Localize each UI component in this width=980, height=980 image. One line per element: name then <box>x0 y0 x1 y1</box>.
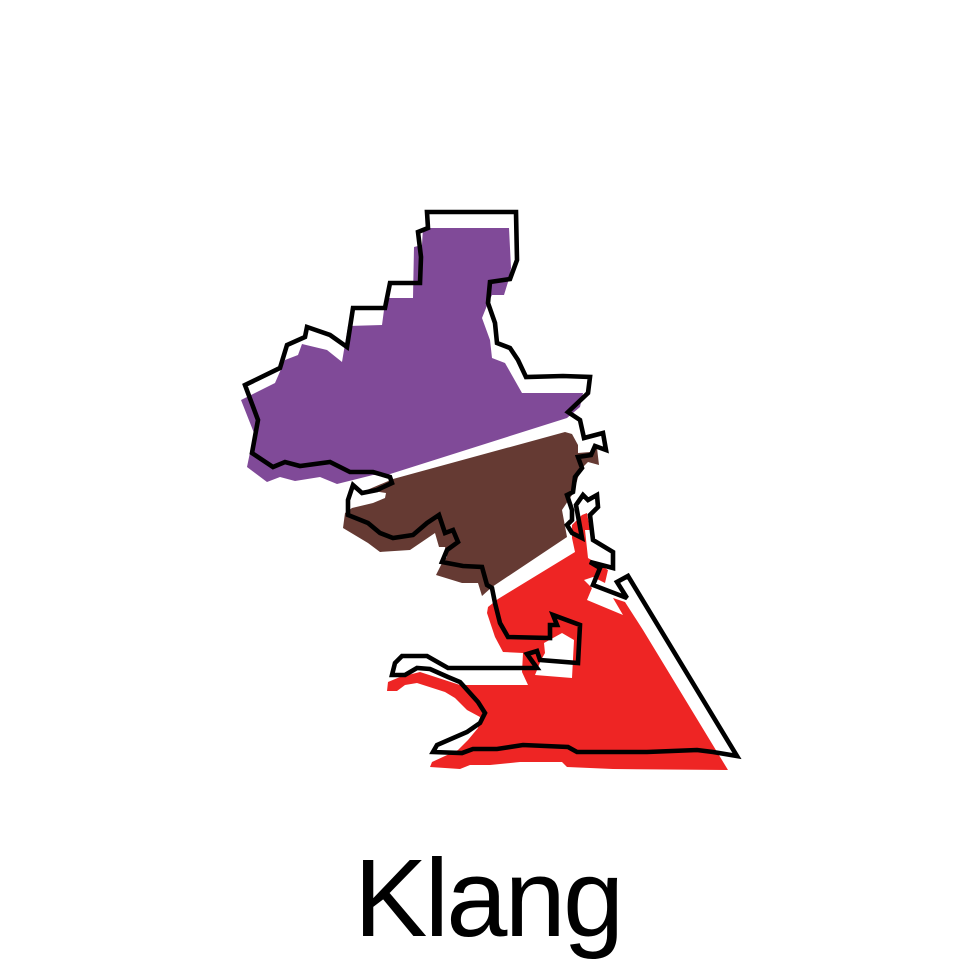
region: brown centre <box>343 432 599 596</box>
white hole in red region <box>535 633 574 678</box>
region: red south <box>387 513 728 770</box>
map of Klang <box>241 212 737 770</box>
black outline <box>245 212 737 756</box>
region: purple north <box>241 228 583 484</box>
title: Klang <box>354 837 621 960</box>
